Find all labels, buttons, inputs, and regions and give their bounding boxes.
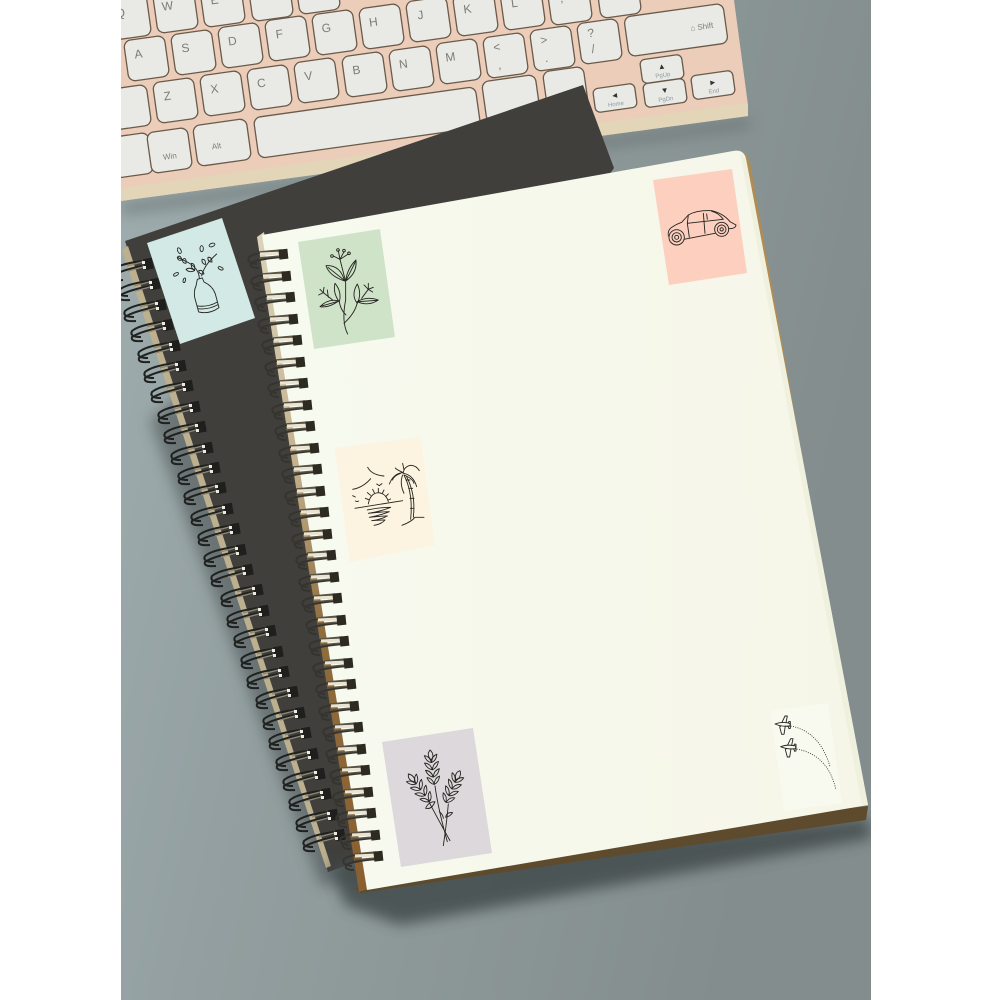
arrow keys: PgDn xyxy=(658,96,674,104)
arrow keys xyxy=(593,54,735,113)
front notebook spiral rings xyxy=(248,249,383,870)
lower key row: , xyxy=(497,58,502,72)
icon: airplanes with dotted trails xyxy=(775,716,836,790)
icon: car xyxy=(668,211,736,245)
home key row xyxy=(123,0,642,82)
arrow keys: ◄ xyxy=(610,91,619,101)
home key row: J xyxy=(416,8,424,22)
lower key row: > xyxy=(539,33,548,47)
home key row: K xyxy=(462,2,472,17)
top key row: Q xyxy=(115,5,126,21)
keyboard shadow xyxy=(121,118,750,215)
back notebook shadow xyxy=(146,396,356,891)
sticker: vase with branches xyxy=(147,218,255,344)
home key row: G xyxy=(321,20,332,36)
home key row: S xyxy=(180,41,190,56)
home key row: F xyxy=(275,27,284,41)
lower key row: . xyxy=(544,51,549,65)
shift key xyxy=(624,3,728,57)
back notebook spine xyxy=(122,246,331,868)
lower key row: / xyxy=(590,42,596,56)
back notebook cover xyxy=(125,85,614,872)
home key row: H xyxy=(368,14,379,30)
lower key row xyxy=(105,18,623,131)
shift key: ⌂ Shift xyxy=(690,21,715,33)
lower key row: B xyxy=(351,63,361,78)
arrow keys: ▲ xyxy=(657,62,666,72)
lower key row: X xyxy=(209,82,219,97)
icon: wheat xyxy=(403,749,466,846)
lower key row: N xyxy=(398,56,409,72)
space bar xyxy=(253,87,481,158)
front notebook right edge xyxy=(744,152,804,467)
lower key row: V xyxy=(303,69,313,84)
bottom key row xyxy=(107,66,589,179)
lower key row: C xyxy=(256,75,267,91)
keyboard xyxy=(105,0,750,215)
arrow keys: ► xyxy=(708,78,717,88)
icon: palm tree and sun xyxy=(353,463,424,525)
back notebook xyxy=(111,85,614,885)
front notebook xyxy=(248,151,872,925)
icon: vase xyxy=(173,242,224,313)
top key row xyxy=(105,0,341,41)
lower key row: ? xyxy=(587,26,595,40)
bottom key row: Win xyxy=(162,151,177,162)
home key row: A xyxy=(133,47,143,62)
front notebook page xyxy=(262,151,868,890)
back notebook spiral rings xyxy=(111,258,346,851)
photo background xyxy=(105,0,872,1000)
front notebook shadow xyxy=(330,818,872,925)
front notebook spine xyxy=(257,232,368,892)
home key row: D xyxy=(227,33,238,49)
sticker: vintage car xyxy=(653,169,747,285)
arrow keys: ▼ xyxy=(660,86,669,96)
lower key row: M xyxy=(444,49,456,65)
keyboard front lip xyxy=(121,103,748,201)
icon: flower xyxy=(319,249,378,334)
arrow keys: Home xyxy=(608,101,625,109)
lower key row: < xyxy=(492,40,501,54)
front notebook cover edge xyxy=(355,806,868,893)
sticker: beach sunset xyxy=(335,437,435,562)
lower key row: Z xyxy=(163,89,172,103)
keyboard body xyxy=(121,0,748,201)
sticker: wheat bouquet xyxy=(382,728,492,867)
bottom key row: Alt xyxy=(211,141,223,151)
page edge highlight xyxy=(740,153,868,806)
sticker: airplanes xyxy=(774,716,836,789)
arrow keys: End xyxy=(708,88,720,96)
sticker: flower sprig xyxy=(298,229,395,349)
arrow keys: PgUp xyxy=(655,72,671,80)
